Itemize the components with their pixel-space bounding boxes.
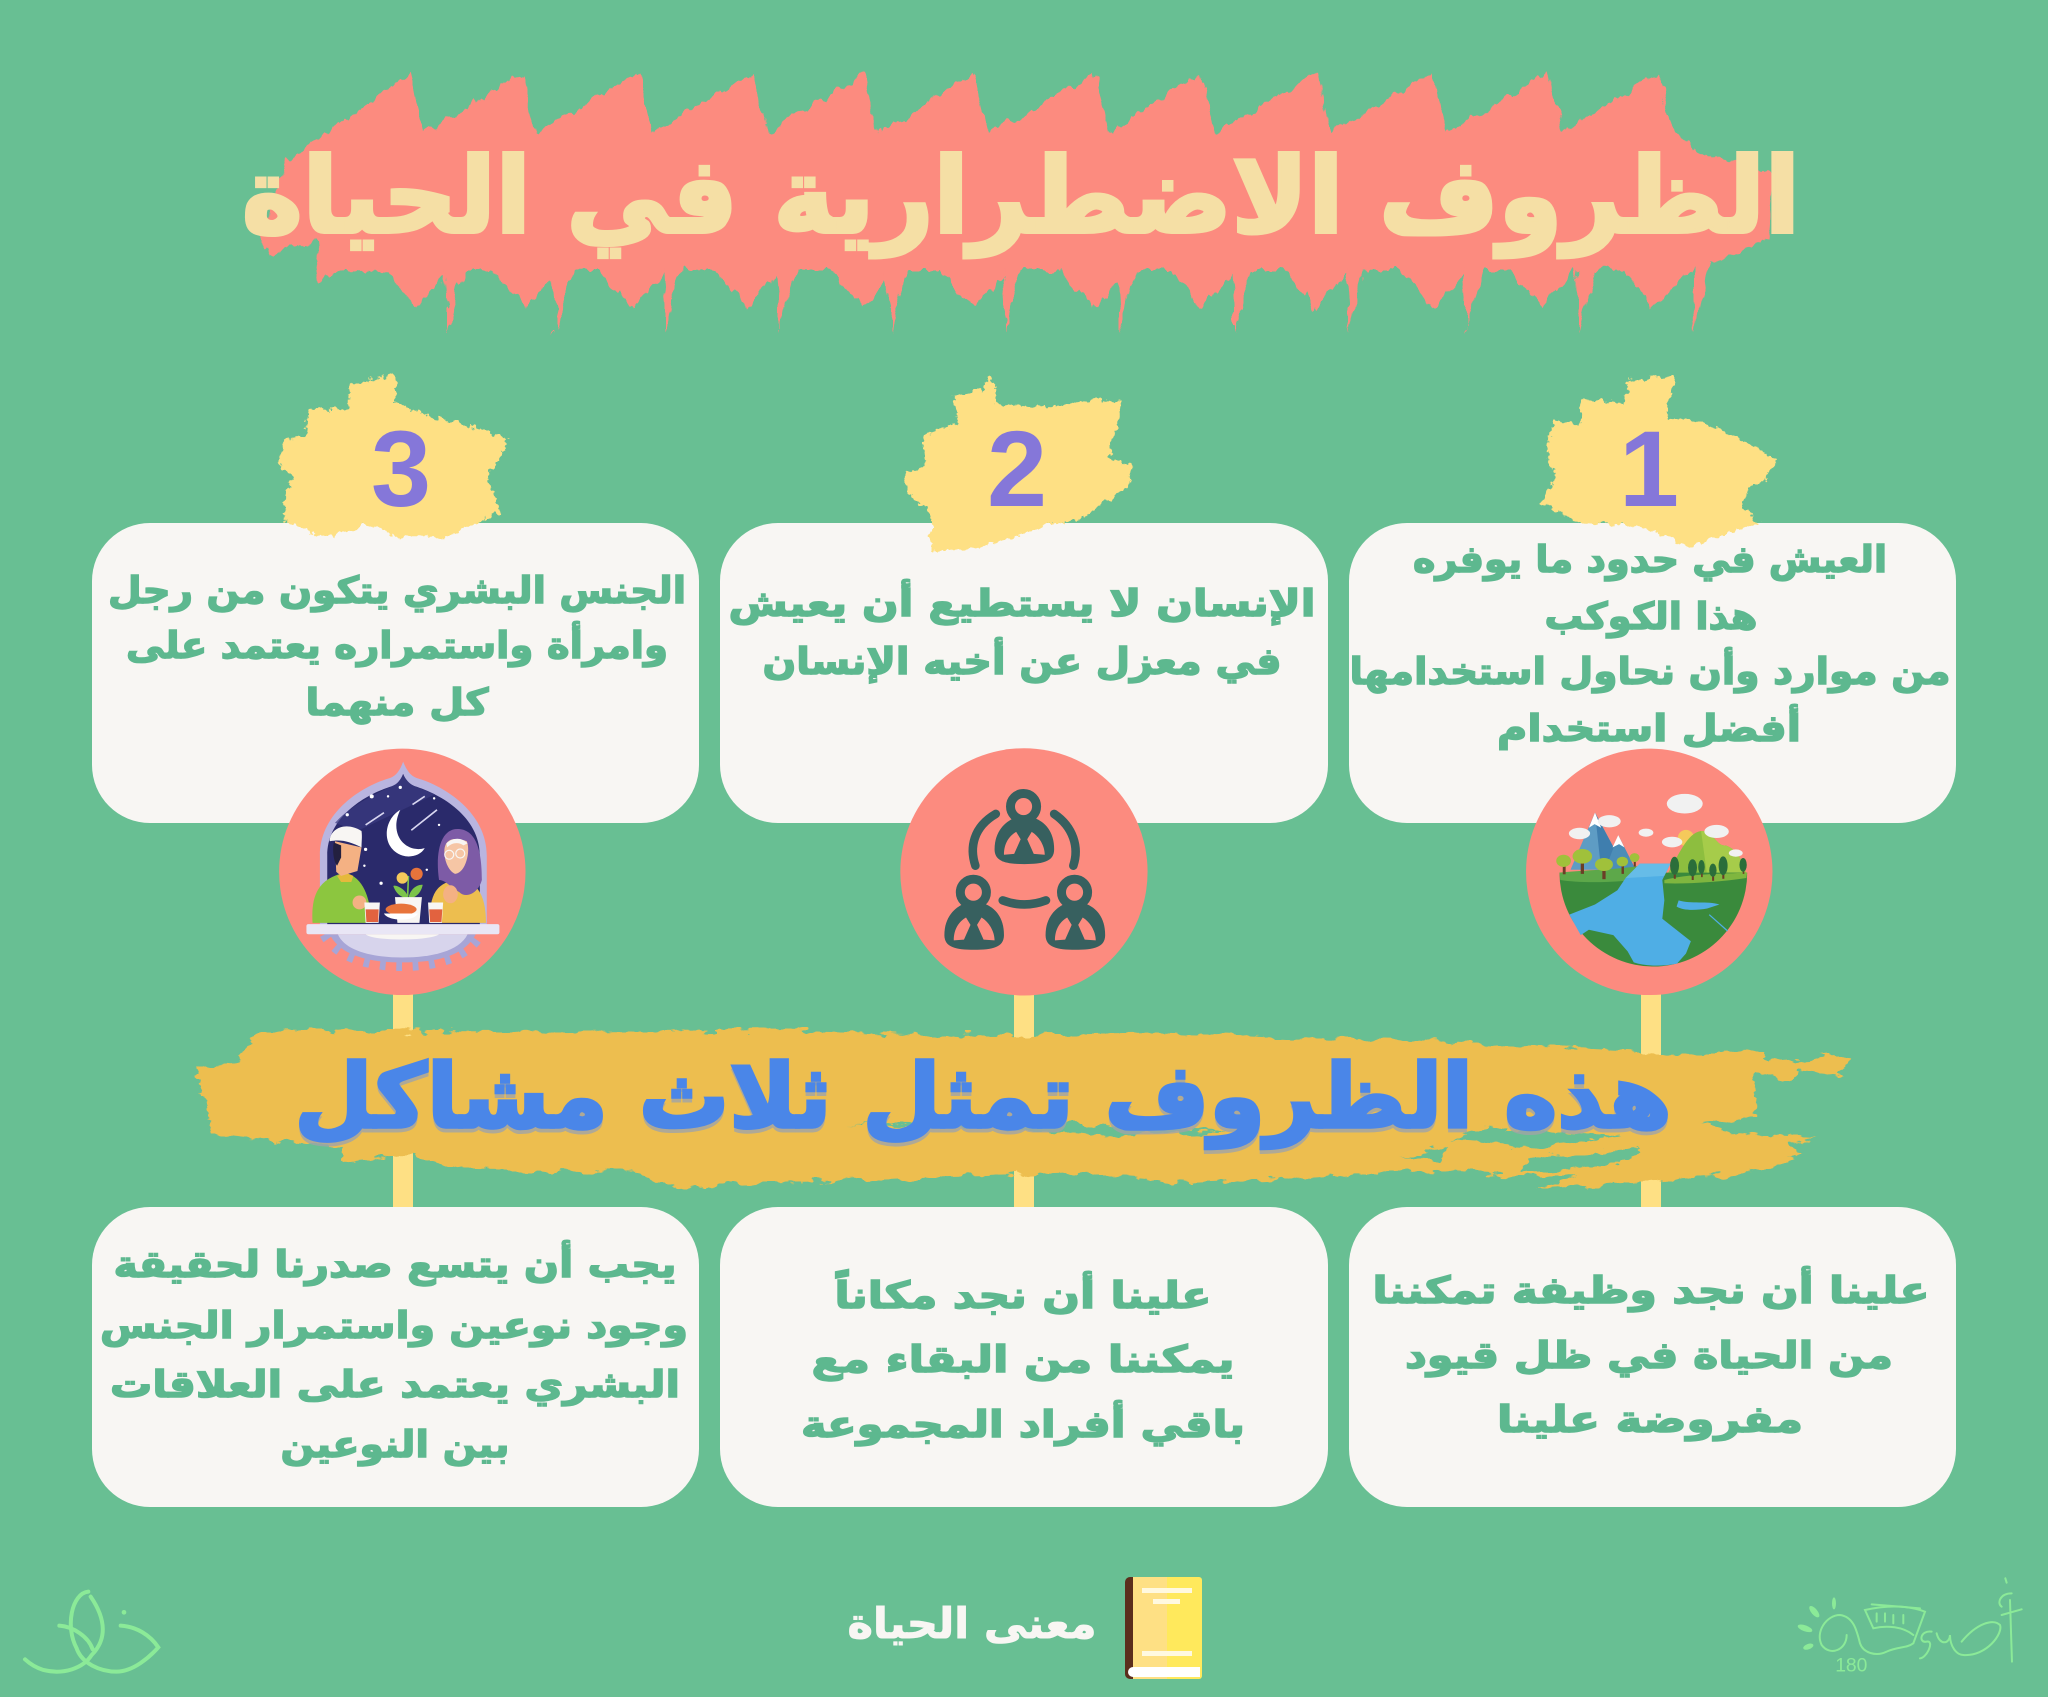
title brush stroke [258,73,1774,333]
text block: condition 3: وامرأة واستمراره يعتمد على [126,621,668,667]
band brush [196,1030,1850,1190]
panel: problem 3: يجب أن يتسع صدرنا لحقيقة [114,1240,676,1286]
panel: problem 1: من الحياة في ظل قيود [1405,1334,1893,1377]
person [1046,879,1105,950]
band heading: هذه الظروف تمثل ثلاث مشاكل [294,1045,1672,1149]
brush: number 3 [280,375,508,537]
panel: condition 3 [92,375,699,823]
person [995,794,1054,864]
text block: condition 1: العيش في حدود ما يوفره [1413,538,1887,581]
icon: earth landscape [1526,749,1772,995]
number 2: 2 [987,408,1047,529]
person [944,879,1004,950]
connector stems [393,990,1661,1210]
panel: problem 2: علينا أن نجد مكاناً [834,1269,1212,1317]
text block: condition 1: أفضل استخدام [1497,704,1801,751]
window sill [306,924,499,966]
panel: problem 2: يمكننا من البقاء مع [812,1338,1234,1381]
panel: problem 2 [720,1207,1328,1507]
plant and table items [364,868,443,923]
number 1: 1 [1619,408,1679,529]
woman [430,829,486,923]
logo: left calligraphy [25,1592,158,1672]
text block: condition 1: من موارد وأن نحاول استخدامها [1350,647,1950,693]
title: الظروف الاضطرارية في الحياة [242,135,1800,258]
text block: condition 3: الجنس البشري يتكون من رجل [108,569,686,612]
icon: couple at window [279,749,526,995]
footer label: معنى الحياة [848,1599,1096,1648]
brush: number 2 [906,377,1133,552]
number 3: 3 [371,408,431,529]
text block: condition 2 [728,579,1316,683]
panel: problem 1: مفروضة علينا [1497,1398,1803,1441]
panel: problem 1 [1349,1207,1956,1507]
text block: condition 2: في معزل عن أخيه الإنسان [762,637,1282,683]
icon: book [1125,1577,1202,1679]
panel: problem 3 [92,1207,699,1507]
panel: condition 2 [720,377,1328,823]
text block: condition 2: الإنسان لا يستطيع أن يعيش [728,579,1316,625]
band heading: هذه الظروف تمثل ثلاث مشاكل [294,1049,1672,1153]
logo number: 180 [1835,1656,1867,1677]
panel: problem 3: بين النوعين [280,1423,510,1466]
text block: condition 1 [1350,538,1950,751]
man [312,826,372,923]
text block: condition 3 [108,569,686,724]
text block: condition 1: هذا الكوكب [1544,595,1758,638]
icon: connected people [900,748,1148,995]
band slits [845,1122,1640,1172]
logo: right calligraphy [1797,1578,2022,1677]
panel: condition 1 [1349,376,1956,823]
brush: number 1 [1541,376,1777,546]
panel: problem 3: البشري يعتمد على العلاقات [110,1363,680,1406]
text block: condition 3: كل منهما [306,681,489,724]
panel: problem 3: وجود نوعين واستمرار الجنس [100,1304,688,1347]
panel: problem 1: علينا أن نجد وظيفة تمكننا [1372,1266,1930,1312]
panel: problem 2: باقي أفراد المجموعة [801,1400,1245,1446]
